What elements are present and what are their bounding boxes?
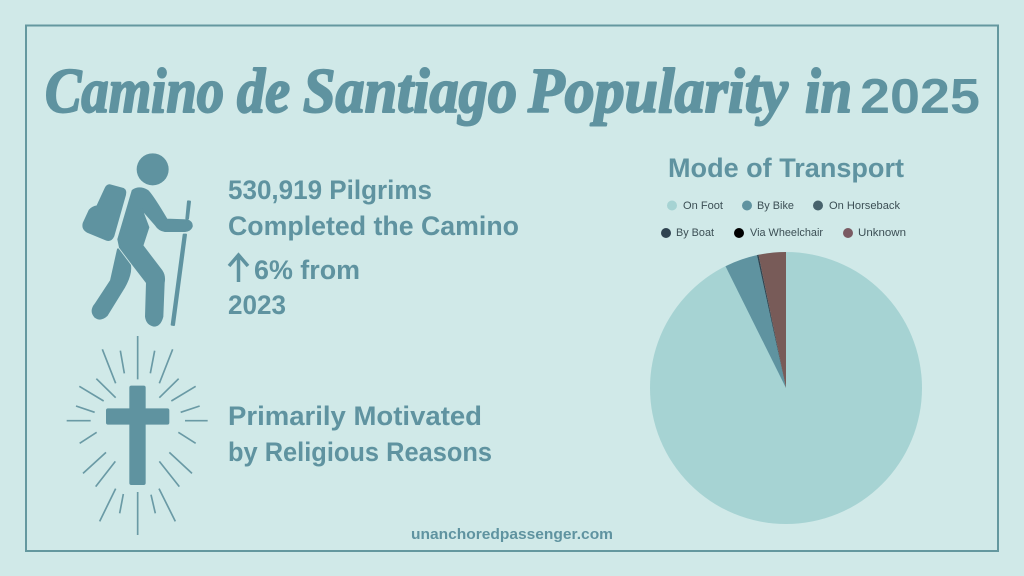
chart legend: On Horseback xyxy=(829,200,900,212)
title xyxy=(45,56,980,126)
stat: pilgrims completed: Completed the Camino xyxy=(228,211,519,241)
title: Santiago xyxy=(303,56,517,126)
stat: change from 2023 xyxy=(228,255,360,320)
text: motivation: Primarily Motivated xyxy=(228,401,482,431)
stat: pilgrims completed: 530,919 Pilgrims xyxy=(228,175,432,205)
title: 2025 xyxy=(860,70,980,124)
title: Camino xyxy=(45,56,224,126)
stat: change from 2023: 2023 xyxy=(228,290,286,320)
pie chart xyxy=(650,252,922,524)
text: motivation xyxy=(228,401,492,467)
chart legend xyxy=(661,200,906,239)
footer source: unanchoredpassenger.com xyxy=(411,526,613,543)
chart legend: On Foot xyxy=(683,200,723,212)
chart heading: Mode of Transport xyxy=(668,153,904,183)
chart legend: By Bike xyxy=(757,200,794,212)
title: de xyxy=(237,56,290,126)
chart legend: Via Wheelchair xyxy=(750,227,823,239)
icon: up arrow xyxy=(229,255,248,282)
icon: cross with rays xyxy=(67,336,208,535)
stat: pilgrims completed xyxy=(228,175,519,241)
title: in xyxy=(805,56,852,126)
title: Popularity xyxy=(527,56,789,126)
text: motivation: by Religious Reasons xyxy=(228,437,492,467)
chart legend: Unknown xyxy=(858,227,906,239)
stat: change from 2023: 6% from xyxy=(254,255,360,285)
chart legend: By Boat xyxy=(676,227,714,239)
icon: hiker xyxy=(83,153,192,326)
